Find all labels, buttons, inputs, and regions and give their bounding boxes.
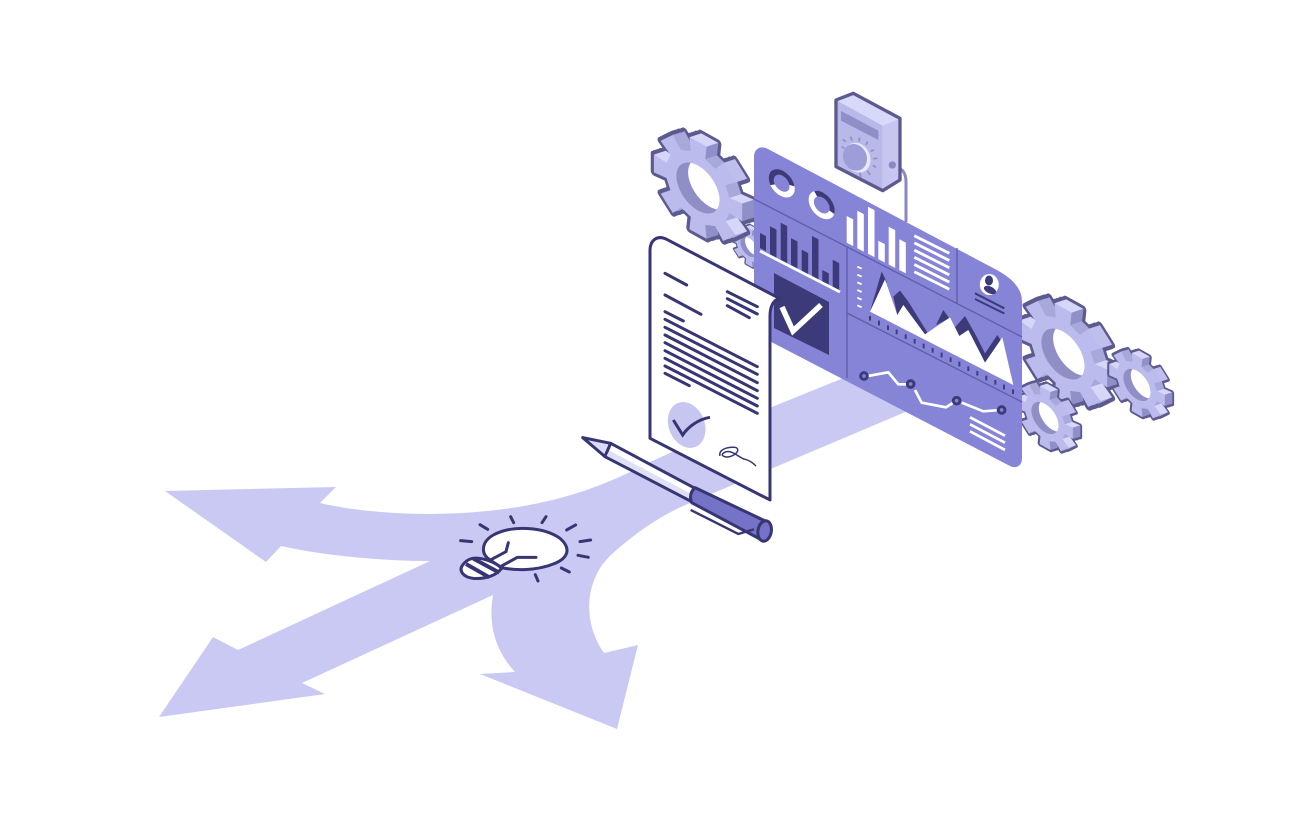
pen grip [691, 488, 767, 540]
bulb base [461, 558, 502, 578]
icon: large gear top left [654, 107, 754, 265]
bulb glass [483, 528, 567, 570]
icon: multimeter [836, 93, 900, 191]
line chart [868, 372, 997, 411]
pen end cap [756, 520, 773, 542]
pen barrel [605, 443, 695, 502]
pen tip [583, 438, 611, 457]
avatar profile [975, 274, 1004, 314]
document sheet [650, 238, 779, 500]
icon: pen [583, 438, 773, 542]
white text lines [914, 236, 949, 289]
dark check box [774, 273, 829, 355]
bulb rays [461, 517, 591, 581]
document with checkmark and signature [650, 238, 779, 500]
three-way arrow paths [159, 355, 910, 729]
cable from multimeter [892, 165, 906, 222]
icon: light bulb [461, 517, 591, 581]
donut chart two [807, 184, 836, 226]
pen clip [691, 510, 754, 534]
line chart nodes [861, 373, 1005, 413]
icon: large gear right [1019, 273, 1119, 431]
white rule under bar chart [760, 251, 840, 292]
signature [720, 447, 756, 466]
document text lines [665, 273, 757, 413]
panel: analytics dashboard [754, 147, 1022, 467]
donut chart one [767, 163, 796, 204]
icon: small gear behind panel [731, 215, 771, 278]
white bar chart [847, 196, 906, 273]
chart y axis marks [857, 267, 862, 307]
icon: small gear far right [1109, 334, 1172, 434]
dashboard background [754, 147, 1022, 467]
bulb filament [492, 543, 536, 566]
mountain area chart [857, 267, 1013, 450]
icon: small gear bottom right [1017, 367, 1080, 467]
white lines lower right [970, 417, 1005, 450]
approval stamp [661, 396, 712, 454]
dashboard dividers [754, 199, 1022, 402]
chart axis ticks [870, 316, 1013, 394]
dark bar chart [760, 209, 839, 290]
